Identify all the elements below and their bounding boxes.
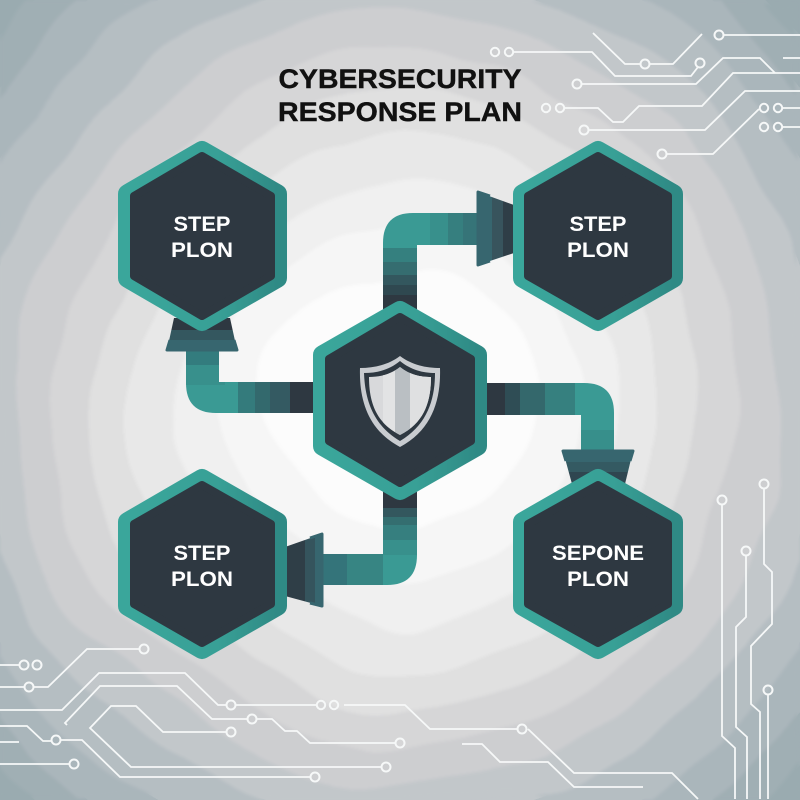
circuit lines: top right [491, 30, 800, 158]
arrow: center to bottom right [487, 383, 634, 484]
hexagon: step top left: STEP [174, 213, 230, 236]
hexagon: step bottom left: STEP [174, 542, 230, 565]
circuit lines: bottom left [0, 644, 698, 799]
hexagon: sepone bottom right: PLON [567, 568, 629, 591]
hexagon: step top left [128, 151, 277, 321]
arrow: center to bottom left [287, 492, 417, 608]
hexagon: step top left: PLON [171, 239, 233, 262]
title [278, 64, 522, 127]
title: RESPONSE PLAN [278, 97, 522, 127]
hexagon: step top right: STEP [570, 213, 626, 236]
arrow: center to top left [166, 318, 313, 413]
hexagon: step top right [523, 151, 673, 321]
hexagon: sepone bottom right: SEPONE [552, 542, 644, 565]
hexagon: sepone bottom right [523, 479, 673, 649]
title: CYBERSECURITY [278, 64, 522, 94]
circuit lines: right side [718, 480, 772, 799]
hexagon: step bottom left [128, 479, 277, 649]
arrow: center to top right [380, 188, 515, 315]
icon: shield [360, 356, 440, 447]
hexagon: center [323, 311, 477, 490]
hexagon: step top right: PLON [567, 239, 629, 262]
hexagon: step bottom left: PLON [171, 568, 233, 591]
